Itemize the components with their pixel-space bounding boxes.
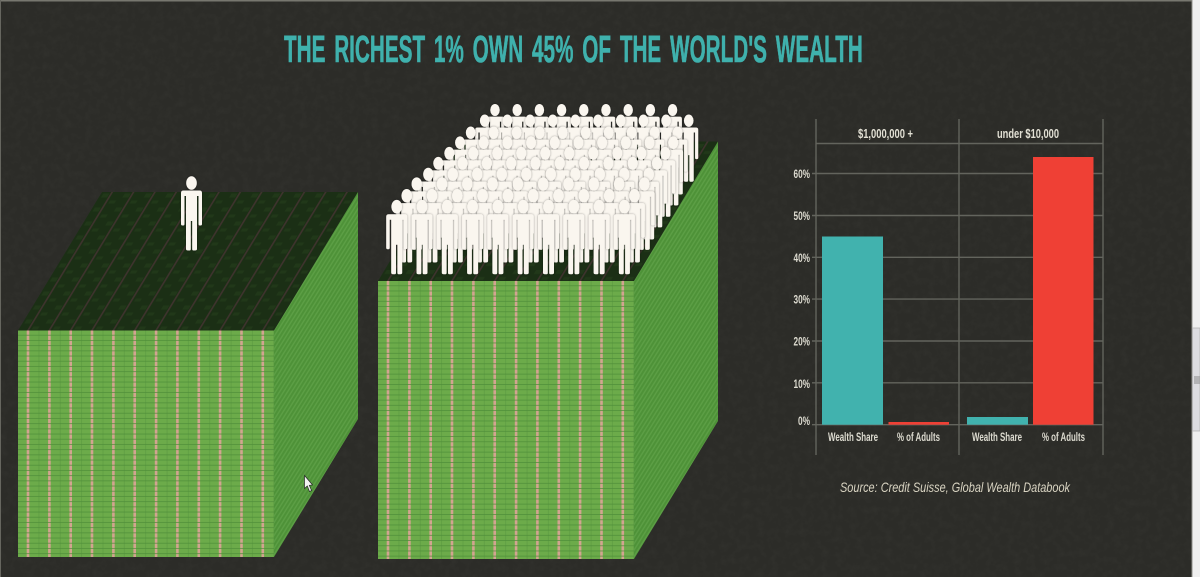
cube side face: [274, 192, 358, 557]
y axis labels: [794, 167, 810, 428]
cube side face: [634, 142, 718, 559]
x axis labels: % of Adults: [1042, 430, 1085, 444]
title: THE RICHEST 1% OWN 45% OF THE WORLD'S WEALTH: [284, 28, 863, 71]
bar: $1,000,000+ percent of adults: [888, 422, 949, 425]
cube top face: [18, 192, 358, 330]
source note: Source: Credit Suisse, Global Wealth Databook: [840, 479, 1071, 495]
x axis labels: [828, 430, 1085, 444]
group header: under $10,000: under $10,000: [997, 126, 1059, 141]
y axis labels: 40%: [794, 251, 810, 265]
y axis labels: 20%: [794, 334, 810, 348]
money cube: top 1% wealth: [18, 192, 358, 557]
x axis labels: Wealth Share: [972, 430, 1022, 444]
single person on first cube: [181, 176, 202, 250]
y axis labels: 30%: [794, 292, 810, 306]
y axis labels: 60%: [794, 167, 810, 181]
bar: under $10,000 percent of adults: [1033, 157, 1094, 425]
x axis labels: Wealth Share: [828, 430, 878, 444]
y axis labels: 10%: [794, 377, 810, 391]
bar chart: wealth share vs percent of adults: [794, 119, 1103, 455]
chart grid lines: [812, 119, 1103, 455]
bar: $1,000,000+ wealth share 45%: [822, 236, 883, 425]
crowd of people on second cube: [386, 104, 698, 274]
browser scrollbar: [1192, 0, 1200, 577]
cube front face: [378, 281, 634, 559]
x axis labels: % of Adults: [897, 430, 940, 444]
bar: under $10,000 wealth share: [967, 417, 1028, 425]
group header: $1,000,000 +: $1,000,000 +: [858, 126, 913, 141]
cube front face: [18, 330, 274, 557]
cube top face: [378, 142, 718, 281]
icon: mouse cursor: [304, 476, 313, 492]
y axis labels: 50%: [794, 209, 810, 223]
y axis labels: 0%: [798, 414, 810, 428]
money cube: bottom wealth group: [378, 142, 718, 559]
